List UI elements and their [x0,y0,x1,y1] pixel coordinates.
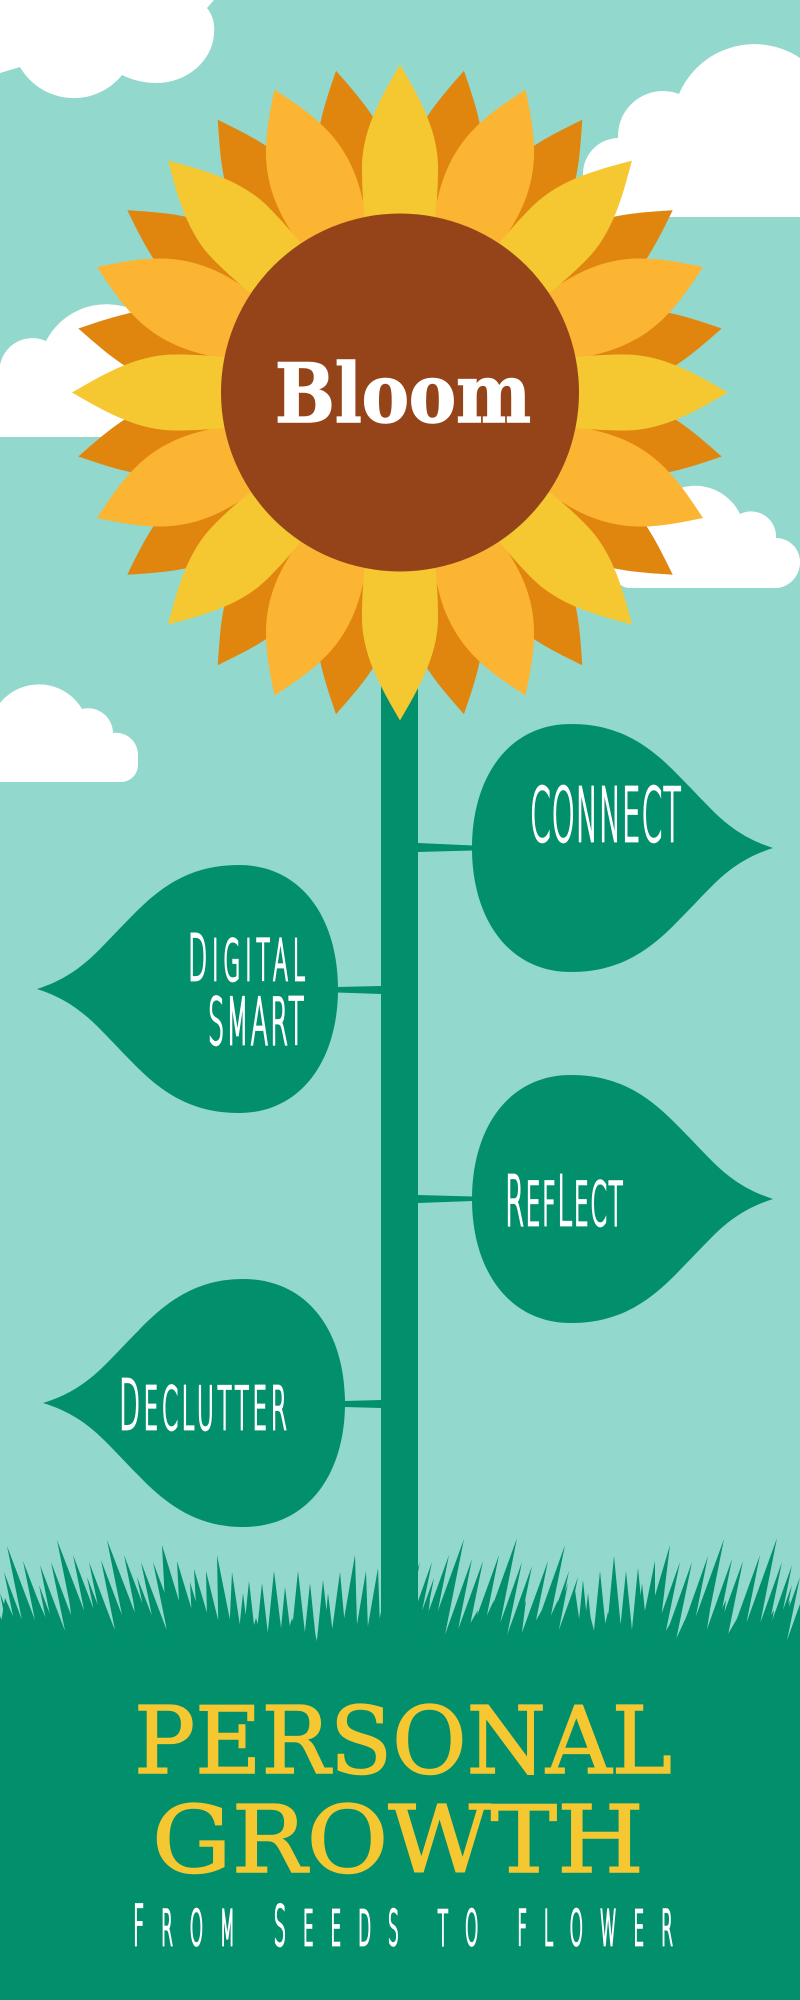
label: digital smart [188,922,305,1060]
leaf: declutter [43,1279,381,1527]
flower label: bloom: Bloom [275,347,531,442]
sunflower [71,63,729,722]
cloud: top right [583,44,800,217]
label: digital smart: DIGITAL [188,922,305,996]
middle petals [81,73,719,712]
title: PERSONAL [134,1687,672,1795]
title: GROWTH [152,1786,644,1894]
cloud: middle right [612,486,800,588]
ground [0,1662,800,2000]
back petals [71,63,729,722]
cloud: lower left [0,684,138,782]
label: connect: CONNECT [530,774,681,859]
cloud: top left [0,0,214,98]
front petals [72,64,728,720]
title [134,1687,672,1894]
subtitle: F ROM S EEDS TO FLOWER [133,1894,673,1958]
flower disk [221,214,579,572]
leaf: digital smart [37,865,381,1113]
stem [381,670,418,1670]
label: declutter: DECLUTTER [119,1366,287,1446]
cloud: middle left [0,304,150,437]
label: reflect: REFLECT [505,1162,623,1242]
leaf: connect [418,724,773,972]
leaf: reflect [418,1075,773,1323]
grass [0,1538,800,1670]
label: digital smart: SMART [208,986,304,1060]
